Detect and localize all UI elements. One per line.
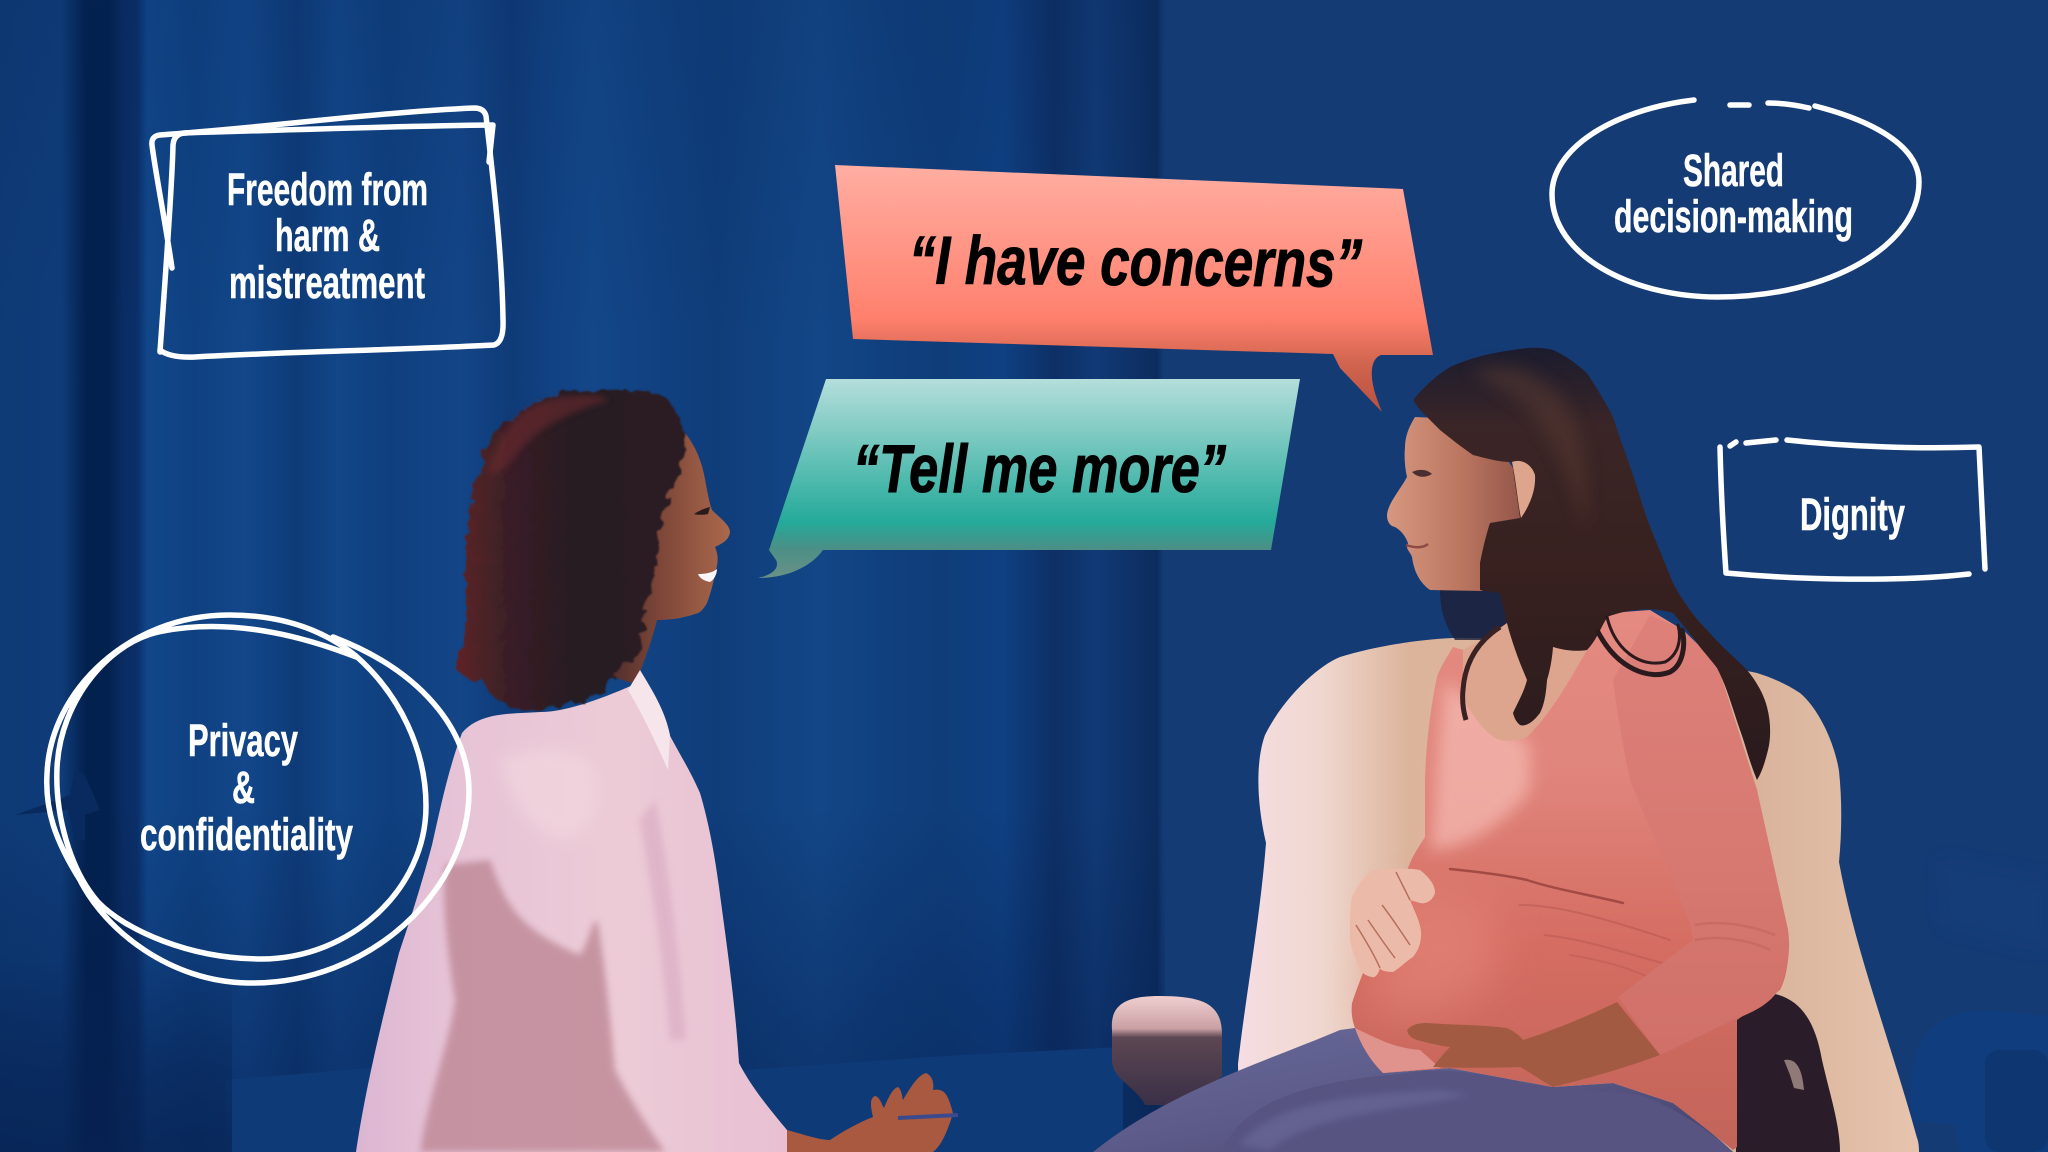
label text: confidentiality — [140, 809, 353, 860]
label: privacy and confidentiality — [47, 615, 469, 983]
label text — [227, 164, 428, 308]
sketched broken ellipse — [1552, 100, 1919, 297]
person: pregnant patient seated on chair — [1093, 348, 1919, 1152]
label text — [1614, 145, 1853, 242]
hair highlights — [1470, 366, 1587, 530]
hair red highlight — [488, 396, 610, 474]
sleeve wrinkles — [1695, 923, 1775, 950]
sketched rectangle — [152, 108, 503, 357]
label: dignity — [1720, 440, 1985, 579]
near thigh — [1222, 1071, 1733, 1152]
translucent hair behind neck — [1440, 590, 1510, 640]
clinician hair — [457, 391, 685, 710]
sketched double circle — [47, 615, 469, 983]
shirt fold lines — [1450, 869, 1670, 978]
label text: decision-making — [1614, 191, 1853, 242]
thigh highlight — [1240, 1090, 1470, 1150]
clinician hand — [787, 1073, 953, 1152]
label text: Shared — [1683, 145, 1784, 196]
label text — [140, 715, 353, 860]
coat body shadow — [420, 860, 665, 1152]
patient face — [1387, 417, 1535, 591]
patient sleeve — [1613, 615, 1789, 1055]
clinician neck and face — [590, 433, 730, 684]
patient eye — [1412, 470, 1432, 477]
patient ear — [1512, 461, 1535, 518]
patient jeans — [1093, 1028, 1733, 1152]
label text: Dignity — [1800, 489, 1905, 540]
label text: & — [232, 762, 255, 813]
bag clasp — [1784, 1060, 1804, 1090]
clinician collar — [628, 670, 670, 770]
exam chair back — [1238, 638, 1919, 1152]
speech bubble: Tell me more — [758, 379, 1300, 578]
chair armrest knob — [1112, 996, 1222, 1105]
coral bubble shape with tail — [835, 165, 1433, 412]
label: freedom from harm and mistreatment — [152, 108, 503, 357]
person: clinician kneeling in profile — [356, 391, 958, 1152]
speech bubble: I have concerns — [835, 165, 1433, 412]
patient hair — [1413, 348, 1770, 780]
patient top — [1352, 610, 1789, 1150]
hair strand along neckline — [1463, 627, 1500, 720]
shoulder bag — [1733, 994, 1840, 1152]
label text: Privacy — [188, 715, 298, 766]
label text: harm & — [275, 210, 380, 261]
clinician coat — [356, 682, 787, 1152]
belly pale underside — [1355, 1028, 1440, 1073]
hair curl over shoulder — [1598, 617, 1684, 675]
chest skin — [1463, 623, 1587, 741]
label text: Freedom from — [227, 164, 428, 215]
finger gaps — [1356, 872, 1410, 968]
patient mouth — [1406, 544, 1428, 547]
clinician smile — [698, 569, 717, 582]
clinician pen — [898, 1115, 958, 1118]
coat sleeve shadow edge — [640, 800, 686, 1040]
coat upper light folds — [500, 749, 598, 840]
upper hand on belly — [1350, 868, 1435, 977]
top upper left highlight — [1430, 680, 1530, 850]
label text: mistreatment — [229, 257, 425, 308]
coral bubble text: “I have concerns” — [909, 222, 1362, 302]
sketched broken rectangle — [1720, 440, 1985, 579]
label: shared decision-making — [1552, 100, 1919, 297]
lower hand and forearm — [1407, 1002, 1660, 1087]
teal bubble shape with tail — [758, 379, 1300, 578]
teal bubble text: “Tell me more” — [853, 431, 1226, 507]
belly highlight — [1370, 897, 1498, 1018]
clinician eye — [694, 507, 710, 515]
